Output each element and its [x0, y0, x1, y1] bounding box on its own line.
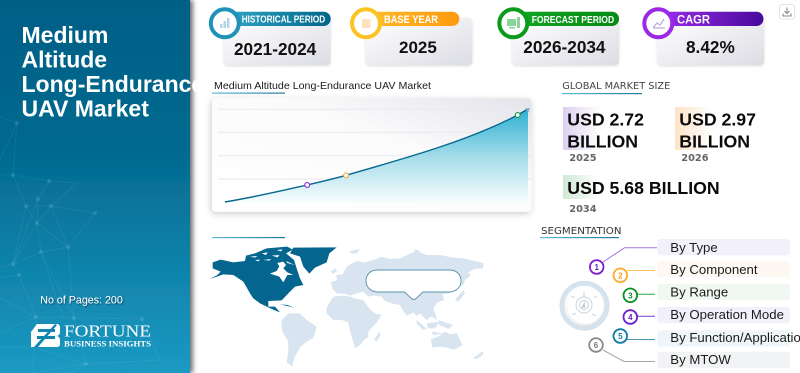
icon: monitor chart: [507, 17, 520, 28]
page count: No of Pages: 200: [40, 294, 123, 306]
segment 2: by component: 2: [618, 271, 623, 280]
market value: 2026: BILLION: [679, 132, 750, 152]
segment 1: by type: 1: [594, 263, 599, 272]
title: Long-Endurance: [22, 71, 204, 97]
market value: 2025: 2025: [569, 153, 597, 164]
heading: global market size: GLOBAL MARKET SIZE: [562, 81, 670, 92]
segment 6: by MTOW: 6: [594, 341, 599, 350]
icon: calendar: [362, 19, 370, 28]
segment 4: by operation mode: 4: [628, 313, 633, 322]
segment 2: by component: [614, 261, 790, 282]
area under curve: [225, 109, 528, 202]
logo: Fortune Business Insights: BUSINESS INSIGHTS: [64, 340, 151, 349]
stat card: historical period: HISTORICAL PERIOD: [242, 14, 326, 26]
stat card: CAGR: [644, 9, 764, 65]
market value: 2026: 2026: [681, 153, 709, 164]
market value: 2025: USD 2.72: [567, 110, 644, 130]
market value: 2026: [675, 107, 756, 164]
rest of world: [282, 249, 484, 367]
icon: bar chart: [220, 18, 230, 28]
icon: download button: [780, 4, 794, 19]
stat card: CAGR: CAGR: [677, 12, 710, 26]
stat card: base year: 2025: [399, 38, 437, 57]
network pattern: [0, 117, 160, 373]
segment 6: by MTOW: [589, 338, 790, 368]
segment 3: by range: 3: [628, 291, 633, 300]
title: Medium: [22, 22, 108, 48]
segment 5: by function/application: [614, 329, 800, 347]
stat card: forecast period: 2026-2034: [523, 37, 606, 57]
icon: growth chart: [653, 19, 665, 28]
segment 1: by type: By Type: [670, 240, 718, 255]
market value: 2034: USD 5.68 BILLION: [567, 178, 720, 198]
market value: 2025: [563, 107, 644, 164]
heading: chart: Medium Altitude Long-Endurance UAV Market: [214, 80, 431, 92]
panel: market growth area chart: [212, 98, 532, 212]
title: UAV Market: [22, 96, 149, 122]
world map: [210, 237, 484, 367]
logo: Fortune Business Insights: FORTUNE: [64, 322, 151, 341]
stat card: historical period: 2021-2024: [234, 39, 317, 59]
segment 1: by type: [590, 239, 790, 274]
logo: Fortune Business Insights: [31, 322, 151, 349]
stat card: CAGR: 8.42%: [686, 37, 735, 57]
segment 3: by range: By Range: [670, 284, 728, 300]
market value: 2025: BILLION: [567, 132, 638, 152]
segmentation hub icon: [562, 283, 607, 328]
market value: 2034: 2034: [569, 204, 597, 215]
title: [22, 22, 204, 122]
North America highlighted: [210, 247, 337, 312]
segment 4: by operation mode: [624, 307, 790, 324]
segment 6: by MTOW: By MTOW: [670, 352, 731, 367]
growth line: [225, 109, 528, 202]
segment 3: by range: [624, 284, 790, 302]
stat card: forecast period: FORECAST PERIOD: [532, 14, 615, 26]
stat card: base year: BASE YEAR: [384, 14, 438, 26]
stat card: historical period: [211, 9, 331, 65]
segment 2: by component: By Component: [670, 262, 758, 277]
segment 5: by function/application: 5: [618, 332, 623, 341]
market value: 2034: [563, 175, 720, 215]
left sidebar panel: [0, 0, 190, 373]
stat card: base year: [352, 9, 472, 65]
stat card: forecast period: [499, 9, 619, 65]
market value: 2026: USD 2.97: [679, 110, 756, 130]
title: Altitude: [22, 46, 107, 72]
heading: segmentation: SEGMENTATION: [541, 226, 622, 237]
segment 4: by operation mode: By Operation Mode: [670, 307, 784, 322]
data points: [305, 183, 310, 187]
map callout: [366, 270, 461, 300]
